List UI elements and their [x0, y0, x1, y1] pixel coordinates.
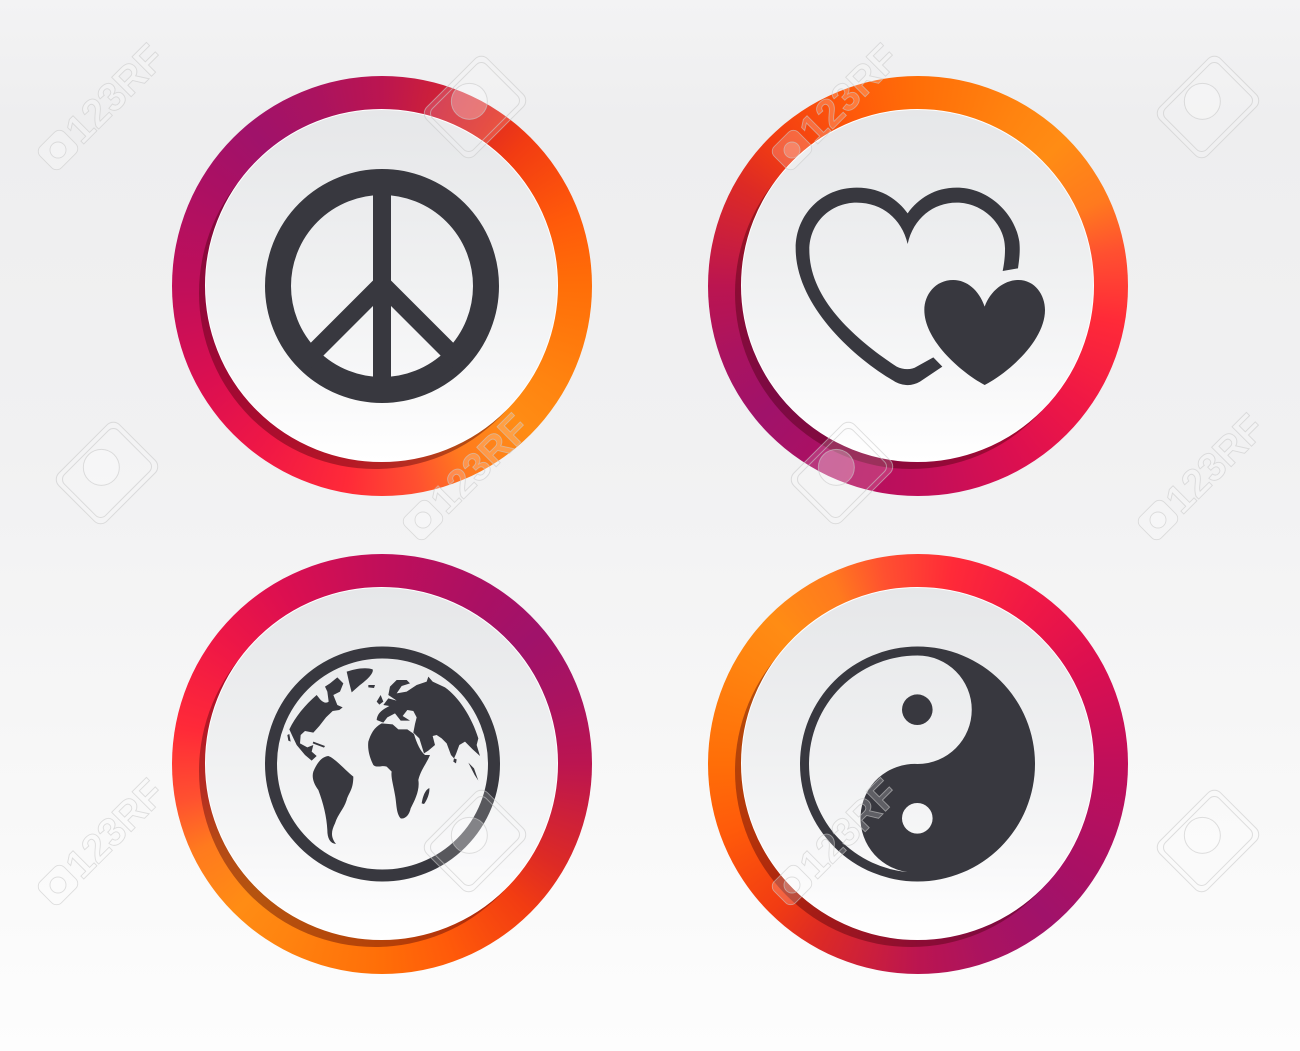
ring shadow: globe	[199, 595, 551, 947]
icon: earth globe	[265, 646, 500, 882]
watermark: logo bottom left	[31, 771, 173, 913]
panel: yin yang badge	[708, 554, 1128, 974]
ring shadow: hearts	[735, 117, 1087, 469]
watermark: logo bottom left: 123RF	[57, 771, 173, 887]
watermark: logo top left	[31, 36, 173, 178]
panel: hearts badge	[708, 76, 1128, 496]
watermark: logo bottom centre: 123RF	[791, 771, 907, 887]
watermark: logo top left: 123RF	[57, 36, 173, 152]
watermark: logo mid right	[1131, 406, 1273, 548]
ring shadow: yin yang	[735, 595, 1087, 947]
watermark: large stamp bottom right	[1154, 787, 1262, 895]
ring shadow: peace	[199, 117, 551, 469]
gradient ring: globe	[172, 554, 592, 974]
watermark: logo mid right: 123RF	[1157, 406, 1273, 522]
icon: peace sign	[265, 169, 499, 403]
watermark: large stamp mid left	[53, 419, 161, 527]
watermark: large stamp top centre	[421, 53, 529, 161]
watermark: logo mid centre: 123RF	[422, 406, 538, 522]
watermark: large stamp top right	[1154, 53, 1262, 161]
gradient ring: peace	[172, 76, 592, 496]
icon: yin yang	[800, 646, 1035, 882]
panel: globe badge	[172, 554, 592, 974]
gradient ring: yin yang	[708, 554, 1128, 974]
watermark: logo top centre	[765, 36, 907, 178]
panel: peace sign badge	[172, 76, 592, 496]
watermark: large stamp globe	[421, 787, 529, 895]
inner disc: yin yang	[741, 587, 1094, 940]
watermark: logo bottom centre	[765, 771, 907, 913]
gradient ring: hearts	[708, 76, 1128, 496]
icon: two hearts	[796, 188, 1045, 386]
inner disc: hearts	[741, 109, 1094, 462]
watermark: large stamp mid centre	[788, 419, 896, 527]
inner disc: peace	[205, 109, 558, 462]
watermark: logo mid centre	[396, 406, 538, 548]
watermark: logo top centre: 123RF	[791, 36, 907, 152]
inner disc: globe	[205, 587, 558, 940]
